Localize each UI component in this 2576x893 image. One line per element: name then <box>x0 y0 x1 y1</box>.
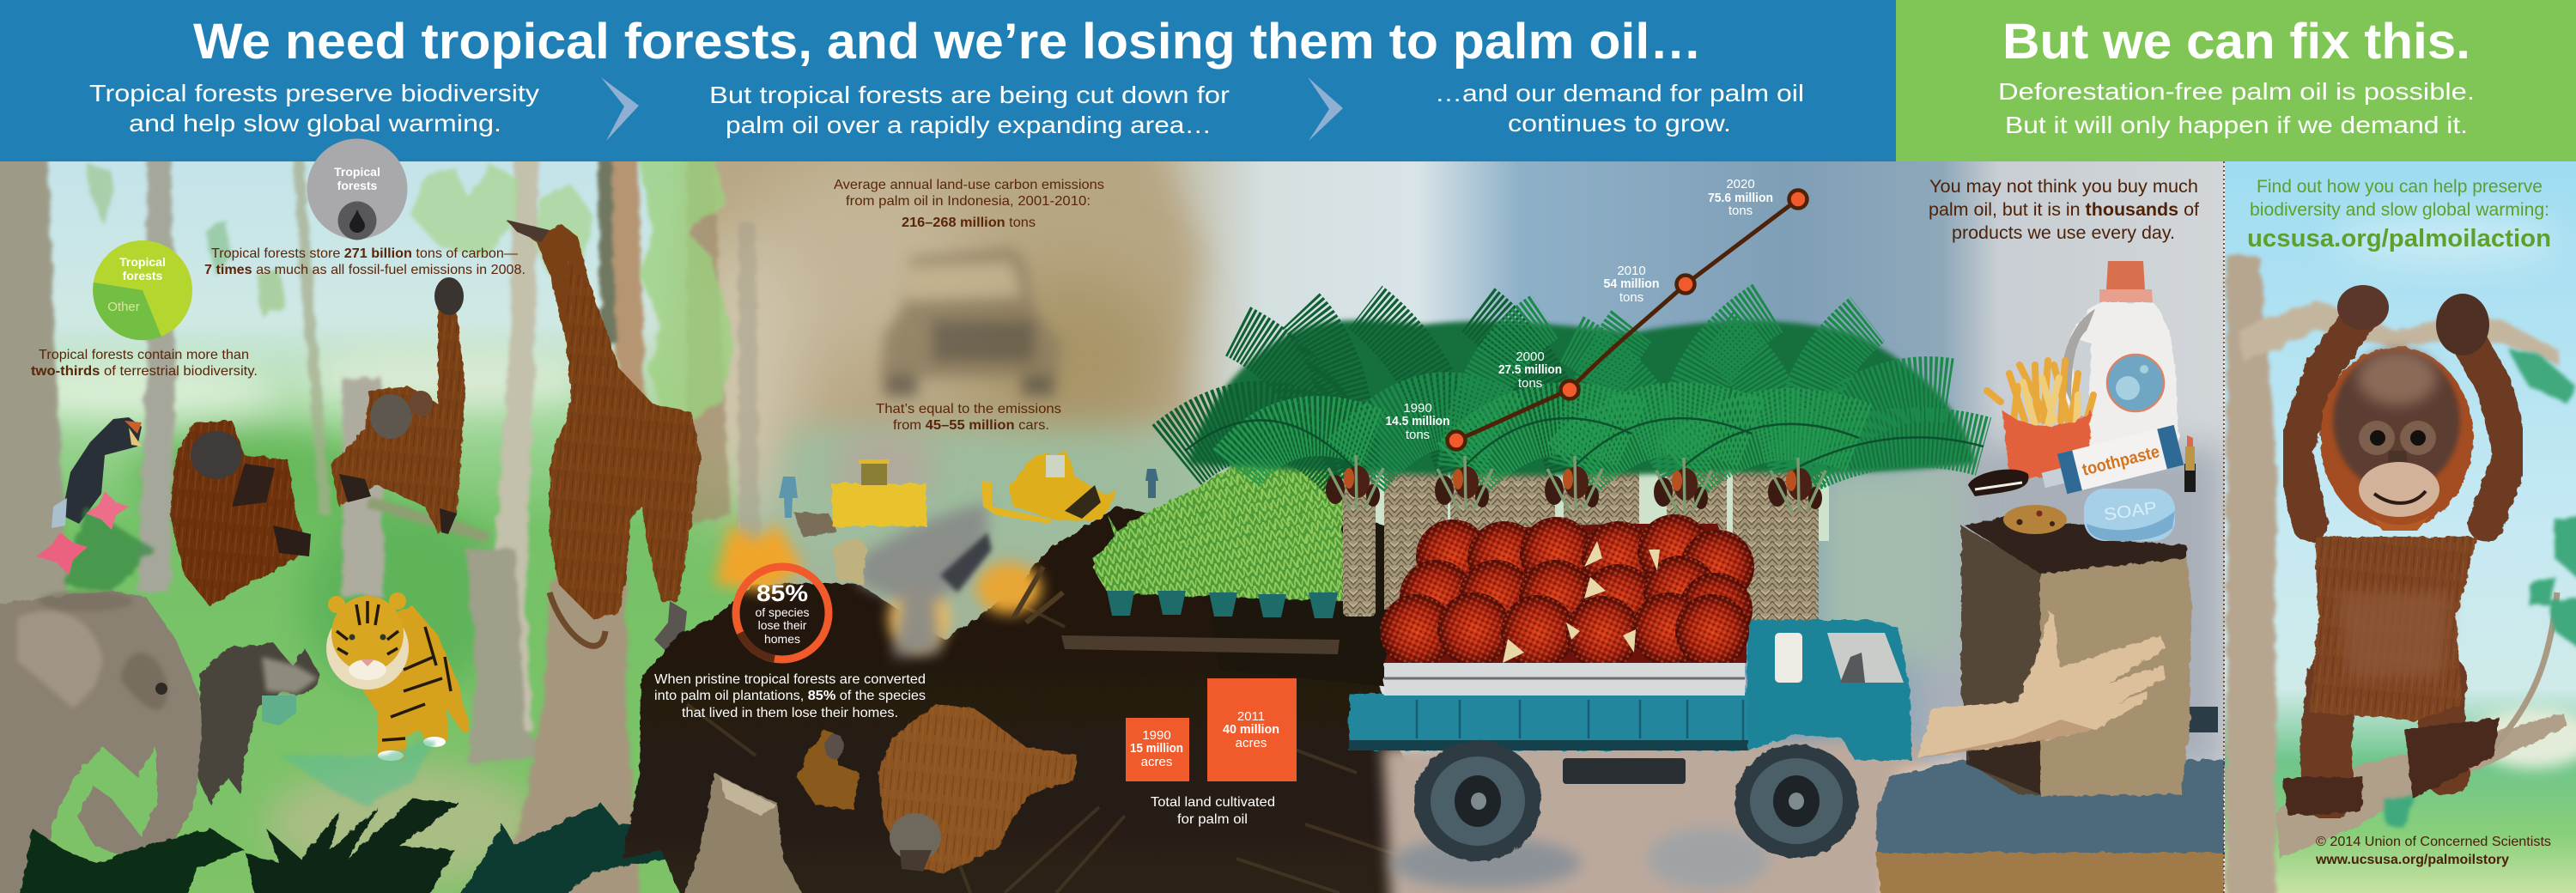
subhead: deforestation: But tropical forests are being cut down for <box>709 82 1230 108</box>
chart: 85 percent ring <box>736 567 829 659</box>
icon: workers <box>779 469 1158 518</box>
icon: fallen orangutan <box>878 704 1078 873</box>
green subhead: But it will only happen if we demand it. <box>2005 112 2468 138</box>
text: call to action <box>2247 177 2551 252</box>
chart: land cultivated bars: acres <box>1236 736 1267 750</box>
chart: 85 percent ring: 85% <box>756 580 808 606</box>
data labels: 75.6 million <box>1708 191 1773 205</box>
green title: But we can fix this. <box>2002 14 2470 70</box>
text: cars equivalent: from 45–55 million cars. <box>893 418 1049 433</box>
icon: lipstick <box>2184 435 2196 492</box>
subhead: biodiversity <box>89 80 539 137</box>
chart: land cultivated bars: 1990 <box>1142 728 1171 743</box>
background: smoke haze <box>678 129 1219 541</box>
icon: sandwich cookie <box>1968 470 2028 496</box>
text: cars equivalent: That’s equal to the emissions <box>876 402 1061 416</box>
ground plants and teal shrubs <box>17 738 687 893</box>
text: species loss: that lived in them lose their homes. <box>682 706 898 720</box>
header: green banner <box>1896 0 2576 161</box>
icon: rhino <box>197 642 319 805</box>
title: We need tropical forests, and we’re losing them to palm oil… <box>193 14 1702 70</box>
subhead: demand: continues to grow. <box>1508 110 1731 137</box>
text: products: palm oil, but it is in thousands of <box>1929 200 2199 220</box>
dotted divider <box>2223 161 2225 893</box>
text: products: products we use every day. <box>1952 223 2175 243</box>
road and ground <box>1382 738 1966 893</box>
subhead: demand: …and our demand for palm oil <box>1435 80 1804 106</box>
text: credits: www.ucsusa.org/palmoilstory <box>2315 853 2509 867</box>
text: species loss <box>654 672 926 720</box>
data points <box>1448 191 1807 450</box>
icon: pink flowers and leaves <box>36 491 155 592</box>
chart: 85 percent ring: homes <box>764 632 800 646</box>
icon: toothpaste tube <box>2038 425 2184 499</box>
table and paper bag <box>1876 515 2224 893</box>
data labels: tons <box>1728 204 1753 218</box>
icon: small distressed orangutan <box>797 730 859 810</box>
fire and smoke <box>714 502 1063 657</box>
data labels: 2000 <box>1516 349 1545 364</box>
chart: carbon circle: forests <box>337 179 378 192</box>
subhead: demand <box>1435 80 1804 137</box>
chart caption: for palm oil <box>1177 812 1248 827</box>
text: carbon storage: Tropical forests store 271 billion tons of carbon— <box>211 246 518 261</box>
icon: elephant <box>0 591 203 893</box>
icon: toothpaste tube: toothpaste <box>2081 442 2161 480</box>
text: products <box>1929 177 2199 243</box>
text: call to action: ucsusa.org/palmoilaction <box>2247 225 2551 252</box>
subhead: biodiversity: and help slow global warming. <box>129 110 501 137</box>
text: call to action: biodiversity and slow global warming: <box>2250 200 2549 220</box>
seedling rows <box>1092 446 1343 618</box>
palm trees <box>1176 307 1984 627</box>
chart: biodiversity pie: Tropical <box>119 255 166 269</box>
icon: big hanging orangutan <box>494 220 701 893</box>
palm fruit pile <box>1380 514 1754 696</box>
text: biodiversity: Tropical forests contain more than <box>39 348 249 362</box>
data labels: 54 million <box>1604 276 1659 291</box>
rear wheel <box>1414 741 1541 861</box>
icon: soap bar: SOAP <box>2103 499 2158 525</box>
data labels: 1990 <box>1403 401 1432 416</box>
text: land-use emissions <box>834 178 1104 230</box>
icon: hand holding bag <box>1917 611 2166 758</box>
text: land-use emissions: 216–268 million tons <box>902 216 1036 230</box>
data labels: 27.5 million <box>1498 362 1562 377</box>
subhead: biodiversity: Tropical forests preserve biodiversity <box>89 80 539 106</box>
text: biodiversity <box>31 348 258 379</box>
chart: land cultivated bars <box>1126 678 1297 827</box>
text: species loss: When pristine tropical forests are converted <box>654 672 926 687</box>
data labels: tons <box>1619 290 1643 305</box>
chart: biodiversity pie: Other <box>107 300 140 314</box>
icon: chocolate chip cookie <box>2003 505 2067 534</box>
forest canopy foliage <box>86 146 734 429</box>
icon: detergent bottle <box>2061 261 2178 459</box>
icon: sitting orangutan <box>170 421 311 607</box>
header: blue banner <box>0 0 1896 161</box>
icon: french fries <box>1987 361 2093 478</box>
soil: cleared land <box>623 498 1417 893</box>
green subhead <box>1998 78 2475 138</box>
subhead: deforestation <box>709 82 1230 138</box>
chart: land cultivated bars: 15 million <box>1130 741 1183 756</box>
text: carbon storage: 7 times as much as all fossil-fuel emissions in 2008. <box>204 263 526 277</box>
icon: tree stump <box>678 773 811 893</box>
data labels: tons <box>1518 376 1542 391</box>
chart: land cultivated bars: 2011 <box>1237 709 1265 724</box>
arrow: chevron one <box>601 77 639 141</box>
chart caption <box>1151 795 1275 827</box>
text: biodiversity: two-thirds of terrestrial biodiversity. <box>31 364 258 379</box>
chart: carbon circle: Tropical <box>334 165 380 179</box>
background: sky behind palms and products <box>738 161 2224 893</box>
chart: land cultivated bars: acres <box>1141 755 1172 769</box>
chart: land cultivated bars: 40 million <box>1223 722 1279 737</box>
chart: biodiversity pie <box>93 240 192 340</box>
icon: ghost car in smoke <box>880 249 1061 396</box>
data labels: 14.5 million <box>1386 414 1449 428</box>
text: credits <box>2315 835 2551 867</box>
palm crown mass <box>1189 320 1975 476</box>
text: land-use emissions: from palm oil in Indonesia, 2001-2010: <box>846 194 1091 209</box>
data labels <box>1386 177 1773 442</box>
text: call to action: Find out how you can help preserve <box>2257 177 2543 197</box>
truck bed and rail <box>1349 663 1748 750</box>
data labels: 2020 <box>1726 177 1755 191</box>
chart: carbon circle <box>307 139 407 240</box>
icon: truck <box>1349 620 1911 861</box>
forest tree trunks <box>0 146 760 764</box>
leaves <box>2383 348 2576 829</box>
green subhead: Deforestation-free palm oil is possible. <box>1998 78 2475 105</box>
chart: 85 percent ring: lose their <box>758 618 807 632</box>
icon: baby orangutan <box>2282 285 2512 816</box>
chart caption: Total land cultivated <box>1151 795 1275 810</box>
text: land-use emissions: Average annual land-use carbon emissions <box>834 178 1104 192</box>
arrow: chevron two <box>1308 77 1343 141</box>
data labels: 2010 <box>1617 264 1646 278</box>
icon: soap bar <box>2084 489 2175 541</box>
chart: palm oil demand line <box>1386 177 1807 450</box>
icon: bulldozers <box>794 452 1116 537</box>
text: carbon storage <box>204 246 526 277</box>
icon: tiger <box>326 592 471 761</box>
chart: biodiversity pie: forests <box>123 269 163 282</box>
background: forest scene <box>0 161 773 893</box>
text: cars equivalent <box>876 402 1061 433</box>
subhead: deforestation: palm oil over a rapidly expanding area… <box>726 112 1212 138</box>
panel: baby orangutan background <box>2225 161 2576 893</box>
text: species loss: into palm oil plantations, 85% of the species <box>654 689 926 703</box>
tree and branches <box>2227 253 2567 893</box>
icon: hornbill bird <box>52 417 142 528</box>
front wheel <box>1735 744 1858 858</box>
truck cab <box>1747 620 1911 760</box>
text: credits: © 2014 Union of Concerned Scientists <box>2316 835 2551 849</box>
text: products: You may not think you buy much <box>1929 177 2198 197</box>
palm fronds <box>1176 307 1984 468</box>
data labels: tons <box>1406 428 1430 442</box>
icon: hanging orangutan with baby <box>331 277 465 534</box>
chart: 85 percent ring: of species <box>755 605 810 619</box>
